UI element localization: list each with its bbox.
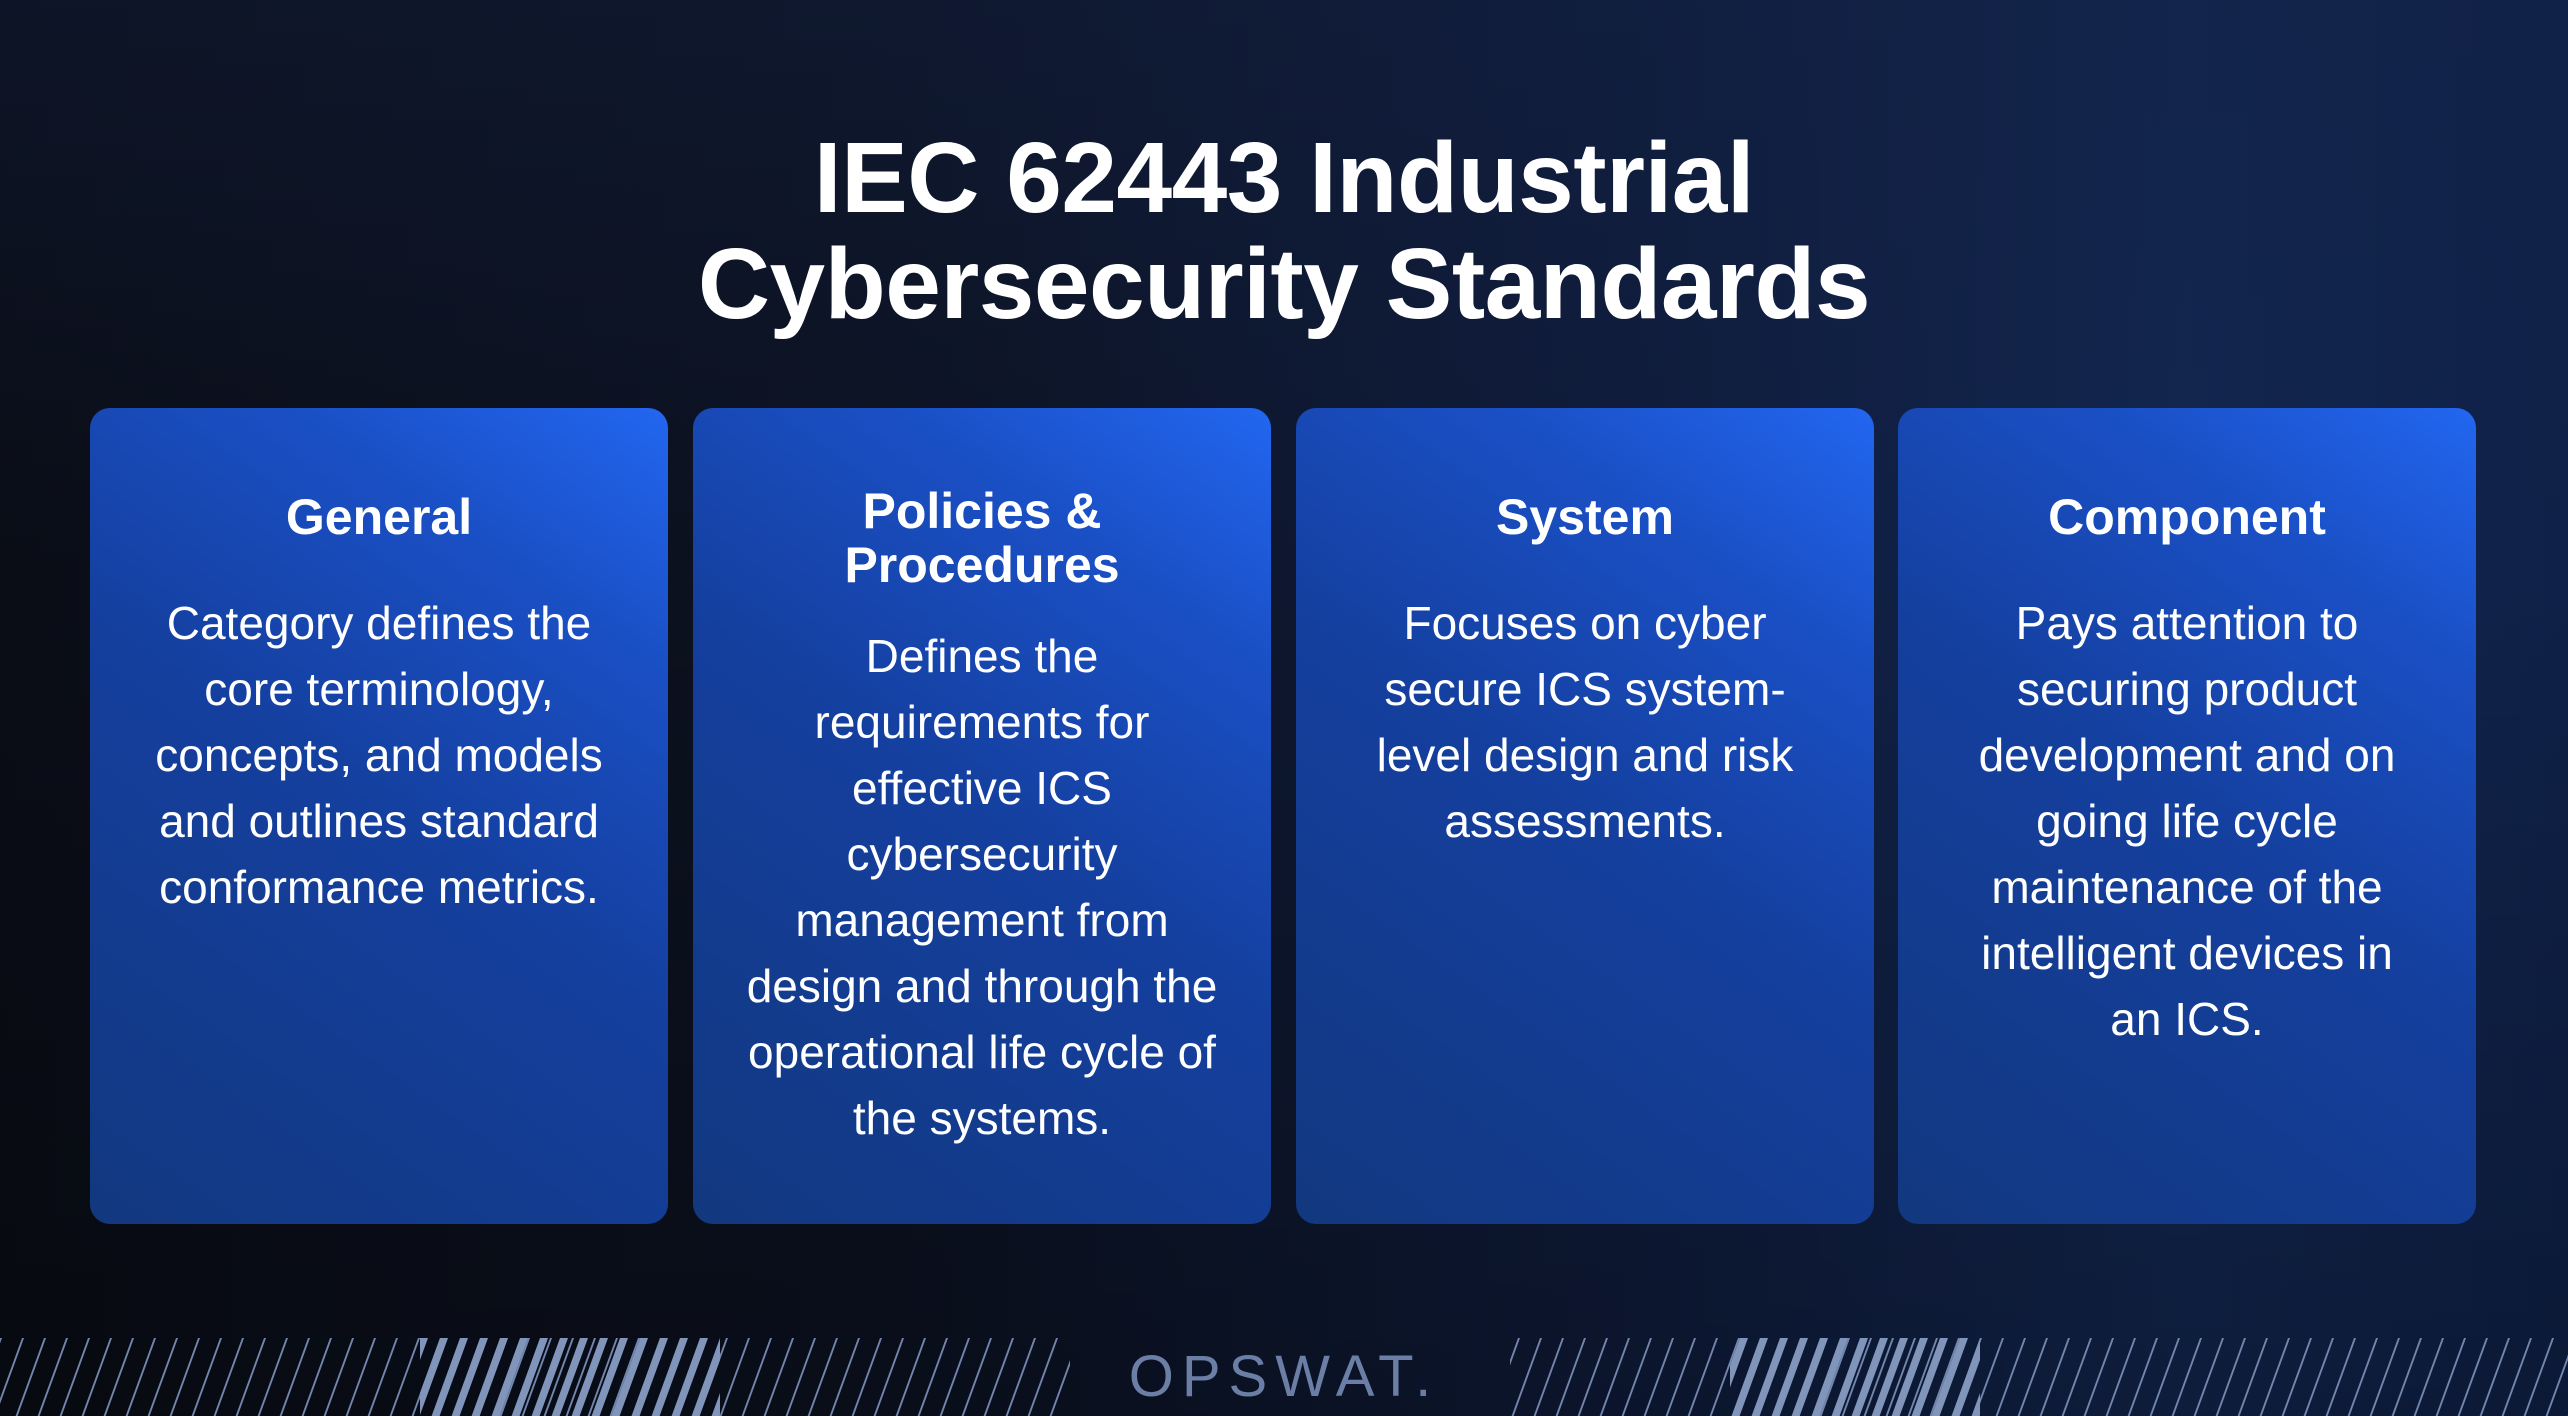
text: general: concepts, and models	[155, 729, 603, 781]
text: component: maintenance of the	[1991, 861, 2383, 913]
text: system	[1377, 597, 1794, 847]
text: general: conformance metrics.	[159, 861, 599, 913]
panel: system	[1296, 408, 1874, 1224]
text: general: Category defines the	[167, 597, 591, 649]
text: component	[1979, 597, 2395, 1045]
text: policies: design and through the	[747, 960, 1217, 1012]
text: component: securing product	[2017, 663, 2357, 715]
text: general	[155, 597, 603, 913]
text: policies: requirements for	[815, 696, 1149, 748]
panel: general	[90, 408, 668, 1224]
heading: policies & procedures: Procedures	[844, 537, 1120, 593]
text: component: Pays attention to	[2016, 597, 2358, 649]
title	[698, 122, 1870, 340]
text: general: core terminology,	[204, 663, 554, 715]
text: policies: cybersecurity	[847, 828, 1117, 880]
text: policies: management from	[795, 894, 1169, 946]
heading: policies & procedures	[844, 483, 1120, 593]
heading: policies & procedures: Policies &	[862, 483, 1102, 539]
text: system: assessments.	[1444, 795, 1726, 847]
text: system: secure ICS system-	[1384, 663, 1786, 715]
heading: component: Component	[2048, 489, 2326, 545]
heading: system: System	[1496, 489, 1674, 545]
text: system: Focuses on cyber	[1403, 597, 1767, 649]
text: component: an ICS.	[2110, 993, 2264, 1045]
text: policies: effective ICS	[852, 762, 1112, 814]
text: policies: Defines the	[866, 630, 1098, 682]
text: general: and outlines standard	[159, 795, 599, 847]
text: component: intelligent devices in	[1981, 927, 2393, 979]
text: component: going life cycle	[2036, 795, 2338, 847]
text: system: level design and risk	[1377, 729, 1793, 781]
text: policies: operational life cycle of	[748, 1026, 1216, 1078]
title: IEC 62443 Industrial	[814, 122, 1754, 234]
panel: component	[1898, 408, 2476, 1224]
heading: general: General	[286, 489, 472, 545]
panel: policies & procedures	[693, 408, 1271, 1224]
text: policies: the systems.	[853, 1092, 1111, 1144]
text: component: development and on	[1979, 729, 2395, 781]
title: Cybersecurity Standards	[698, 228, 1870, 340]
text: policies	[747, 630, 1217, 1144]
logo: OPSWAT.	[1129, 1344, 1439, 1409]
